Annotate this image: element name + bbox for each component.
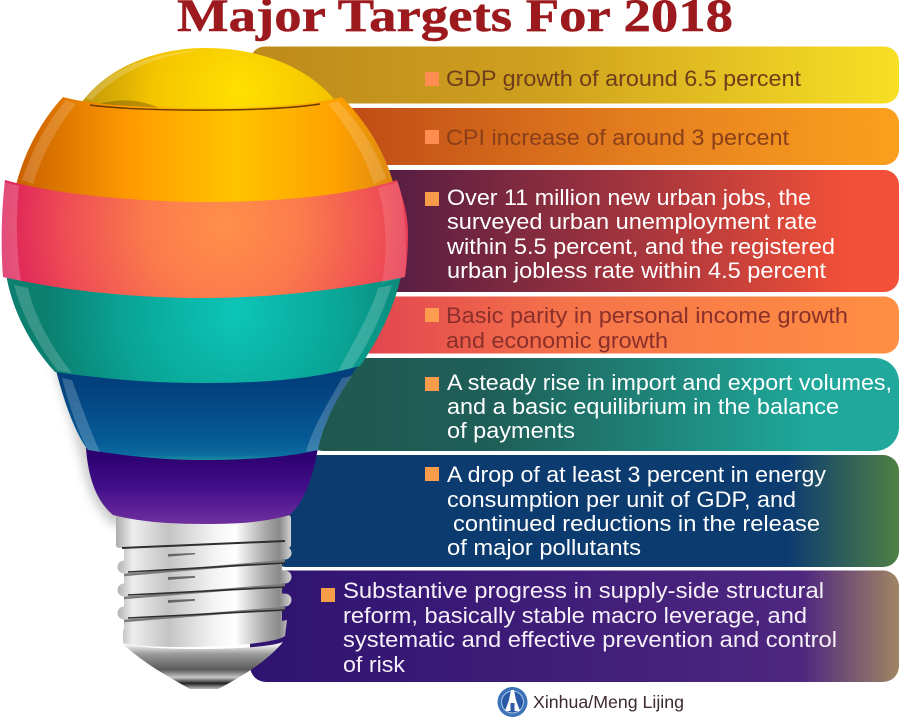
- text block: within 5.5 percent, and the registered: [446, 234, 835, 259]
- teal section: [6, 272, 402, 383]
- text block: systematic and effective prevention and control: [343, 627, 837, 652]
- panel background: [300, 108, 899, 165]
- panel background: [300, 296, 899, 354]
- bullet: [425, 72, 439, 86]
- text block: of major pollutants: [447, 535, 641, 560]
- text block: [446, 185, 835, 283]
- text block: and a basic equilibrium in the balance: [447, 394, 839, 419]
- credit: Xinhua/Meng Lijing: [498, 687, 684, 717]
- text block: surveyed urban unemployment rate: [447, 209, 817, 234]
- text block: of payments: [447, 418, 575, 443]
- text block: Basic parity in personal income growth: [446, 303, 848, 328]
- text block: CPI increase of around 3 percent: [446, 125, 790, 150]
- bullet: [425, 377, 439, 391]
- orange section: [16, 97, 394, 210]
- panel background: [340, 170, 899, 292]
- text block: Over 11 million new urban jobs, the: [447, 185, 811, 210]
- panel: CPI target: [300, 108, 899, 165]
- bullet: [425, 467, 439, 481]
- text block: and economic growth: [446, 328, 668, 353]
- pink section: [2, 180, 408, 298]
- bulb shadow: [48, 340, 130, 525]
- screw base: [116, 515, 291, 689]
- text block: reform, basically stable macro leverage, and: [343, 603, 807, 628]
- text block: GDP growth of around 6.5 percent: [446, 66, 802, 91]
- credit text: Xinhua/Meng Lijing: [533, 692, 684, 712]
- text block: consumption per unit of GDP, and: [447, 487, 796, 512]
- text block: A drop of at least 3 percent in energy: [447, 462, 827, 487]
- bullet: [425, 308, 439, 322]
- blue section: [55, 360, 362, 460]
- text block: urban jobless rate within 4.5 percent: [447, 258, 827, 283]
- panel: trade target: [300, 358, 899, 451]
- panel background: [250, 570, 899, 682]
- text block: [343, 578, 837, 677]
- panel: jobs target: [340, 170, 899, 292]
- yellow dome: [78, 48, 338, 113]
- panel background: [250, 46, 899, 104]
- panel background: [270, 455, 899, 567]
- icon: Xinhua logo: [498, 687, 528, 717]
- purple section: [86, 448, 318, 524]
- bullet: [321, 588, 335, 602]
- icon: light bulb: [2, 48, 408, 689]
- panel: supply-side reform target: [250, 570, 899, 682]
- bullet: [425, 130, 439, 144]
- text block: A steady rise in import and export volumes,: [447, 370, 892, 395]
- panel background: [300, 358, 899, 451]
- text block: of risk: [343, 652, 406, 677]
- panel: income growth target: [300, 296, 899, 354]
- text block: [447, 462, 827, 560]
- text block: [446, 303, 848, 353]
- text block: Substantive progress in supply-side structural: [343, 578, 824, 603]
- text block: [447, 370, 892, 443]
- text block: continued reductions in the release: [453, 511, 820, 536]
- panel: energy target: [270, 455, 899, 567]
- panel: GDP growth target: [250, 46, 899, 104]
- bullet: [425, 192, 439, 206]
